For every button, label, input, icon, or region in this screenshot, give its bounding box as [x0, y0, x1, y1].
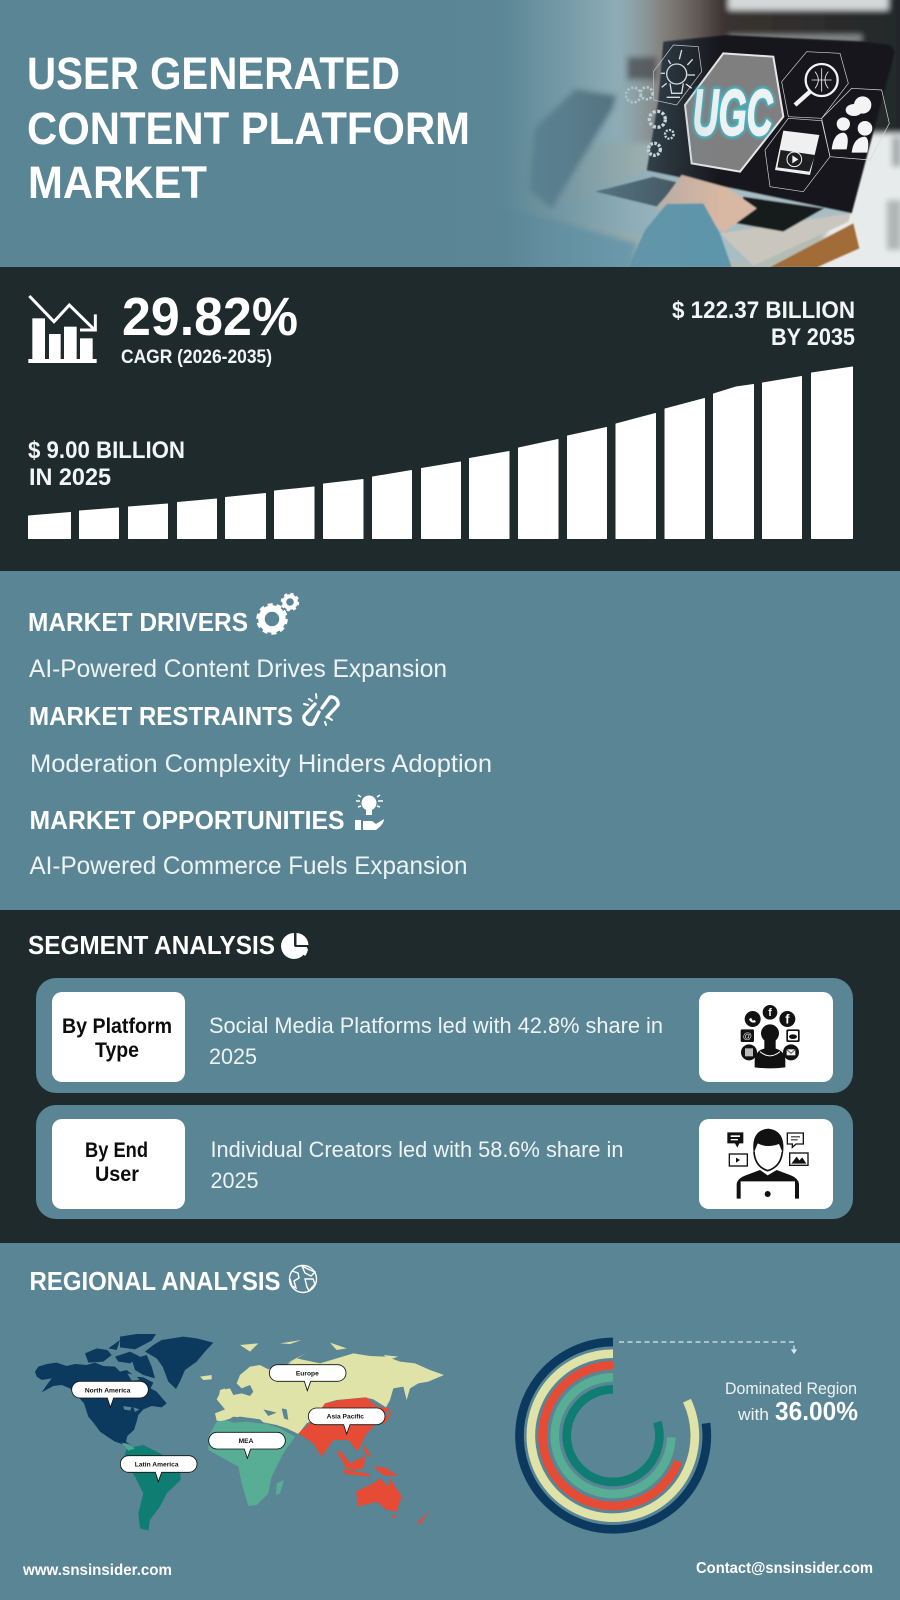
heading: segment analysis: SEGMENT ANALYSIS: [28, 930, 275, 960]
card: by end user: [36, 1105, 853, 1219]
icon: social media user: f: [785, 1012, 790, 1026]
inland seas: [263, 1408, 288, 1420]
region: Central America link: [122, 1443, 135, 1451]
text: dominated region: 36.00%: [775, 1396, 858, 1426]
Mediterranean sea: [225, 1417, 265, 1424]
forecast value: $ 122.37 BILLION: [672, 297, 855, 324]
world map: [35, 1334, 444, 1531]
region: North America: [35, 1334, 213, 1446]
forecast value: BY 2035: [771, 324, 855, 351]
icon: creator with laptop: [727, 1129, 808, 1199]
panel: header background: [0, 0, 900, 267]
description: Social Media Platforms led with 42.8% share in: [209, 1013, 663, 1038]
arrow: dashed leader: [619, 1342, 796, 1353]
icon box: [699, 1119, 833, 1209]
heading: market opportunities: MARKET OPPORTUNITIES: [30, 805, 344, 835]
label box: [52, 1119, 185, 1209]
base value: [28, 437, 185, 491]
CAGR label: CAGR (2026-2035): [121, 347, 272, 368]
north american inland waters: [123, 1373, 139, 1412]
icon: social media user: [741, 1005, 800, 1068]
icon box: [699, 992, 833, 1082]
CAGR value: 29.82%: [122, 287, 298, 347]
callout: MEA: MEA: [239, 1438, 254, 1445]
label text: Type: [95, 1039, 139, 1062]
header photo: laptop with UGC hexagons: [516, 0, 900, 267]
footer: contact: Contact@snsinsider.com: [696, 1560, 873, 1577]
callout: North America: [72, 1381, 148, 1407]
title: USER GENERATED: [27, 48, 400, 99]
description: Individual Creators led with 58.6% share in: [210, 1137, 624, 1162]
callout: Europe: Europe: [296, 1371, 319, 1378]
heading: market drivers: MARKET DRIVERS: [28, 607, 248, 637]
heading: market restraints: MARKET RESTRAINTS: [29, 701, 293, 731]
label text: [62, 1015, 172, 1062]
panel: segment analysis: [0, 910, 900, 1243]
callout: North America: North America: [85, 1387, 131, 1394]
base value: $ 9.00 BILLION: [28, 437, 185, 464]
region: Asia Pacific: [298, 1397, 431, 1524]
icon: globe: [290, 1266, 316, 1292]
photo backdrop layer: [520, 0, 900, 267]
text: restraint: Moderation Complexity Hinders Adoption: [30, 750, 492, 778]
region: Latin America: [123, 1445, 181, 1531]
icon: gears: [258, 594, 298, 633]
video window icon: [775, 131, 819, 175]
description: 2025: [210, 1168, 258, 1193]
icon: bar chart with falling arrow: [28, 296, 97, 363]
icon: social media user: f: [768, 1007, 772, 1019]
callout: Latin America: [120, 1456, 197, 1482]
bar chart: market growth: [28, 367, 852, 538]
laptop and hands layer: [596, 34, 895, 267]
icon: hand with bulb: [355, 795, 384, 830]
footer: website: www.snsinsider.com: [22, 1562, 172, 1579]
title: [27, 48, 470, 208]
card: by platform type: [36, 978, 853, 1093]
heading: regional analysis: REGIONAL ANALYSIS: [30, 1266, 280, 1296]
callout: Asia Pacific: Asia Pacific: [327, 1414, 364, 1421]
label text: By End: [85, 1139, 148, 1162]
callout: Latin America: Latin America: [135, 1461, 179, 1468]
callout: Asia Pacific: [308, 1408, 385, 1434]
label text: By Platform: [62, 1015, 172, 1038]
panel: regional analysis: [0, 1243, 900, 1600]
region: MEA: [208, 1418, 295, 1506]
panel: market size: [0, 267, 900, 571]
radial bar chart: [519, 1342, 707, 1529]
icon: pie chart: [281, 933, 308, 959]
label text: [85, 1139, 148, 1186]
text: driver: AI-Powered Content Drives Expansion: [29, 655, 447, 683]
title: MARKET: [28, 157, 207, 208]
people icon: [832, 96, 872, 153]
panel: market dynamics: [0, 571, 900, 910]
description: [209, 1013, 663, 1069]
bulb icon: [661, 50, 695, 97]
title: CONTENT PLATFORM: [27, 103, 470, 154]
icon: broken chain: [304, 694, 338, 725]
text: dominated region: Dominated Region: [725, 1379, 857, 1398]
text: dominated region: with: [737, 1405, 769, 1424]
magnifier icon: [795, 64, 838, 105]
icon: social media user: @: [743, 1031, 752, 1041]
callout: Europe: [269, 1365, 346, 1391]
forecast value: [672, 297, 855, 351]
faded gear icons: [626, 87, 674, 155]
photo fade overlay: [450, 0, 720, 267]
label box: [52, 992, 185, 1082]
UGC hexagon: [685, 53, 783, 172]
UGC lettering glow: UGC: [693, 76, 773, 149]
description: [210, 1137, 624, 1193]
base value: IN 2025: [29, 464, 111, 491]
UGC lettering front: UGC: [693, 76, 773, 149]
description: 2025: [209, 1044, 257, 1069]
label text: User: [95, 1163, 139, 1186]
region: Europe and North Asia: [200, 1340, 444, 1434]
text: dominated region: [725, 1379, 858, 1426]
callout: MEA: [209, 1432, 285, 1458]
hexagon outlines: [653, 45, 889, 192]
text: opportunity: AI-Powered Commerce Fuels Expansion: [30, 852, 468, 880]
